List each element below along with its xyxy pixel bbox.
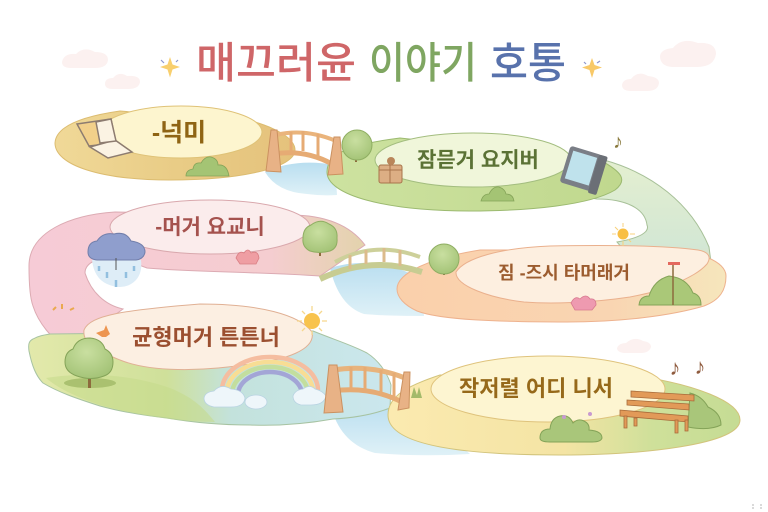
darker meadow strip (46, 375, 215, 422)
icon: large shrub with signpost (639, 262, 701, 305)
icon: sun (297, 306, 327, 335)
icon: music note 1: ♪ (613, 131, 623, 153)
decorative clouds (62, 41, 716, 353)
icon: shrub 2 (481, 187, 514, 201)
title: 호통 (490, 40, 566, 88)
bridge 2 (320, 248, 422, 279)
title (196, 40, 566, 88)
path segment: orange ground (397, 250, 726, 322)
corner marks (752, 505, 762, 508)
label: step 1 (100, 106, 262, 158)
label: step 1: -넉미 (152, 119, 206, 147)
path segment: start ground (55, 111, 295, 180)
bridge 3 (324, 365, 410, 413)
path segment: green ground (327, 138, 622, 211)
icon: small sun (612, 223, 635, 246)
water under first bridge (265, 163, 337, 195)
label: balance (blob) (84, 304, 312, 370)
label: step 4 (orange) (456, 245, 709, 303)
icon: rainbow (222, 357, 318, 395)
icon: music notes (670, 354, 706, 380)
icon: pink flower 2 (571, 296, 596, 310)
icon: sprout orange (96, 325, 110, 337)
icon: tree 3 (429, 244, 459, 275)
title: 이야기 (369, 40, 477, 88)
bridge 1 (266, 130, 343, 175)
icon: storm cloud and umbrella (88, 233, 145, 287)
label: step 2 (375, 133, 571, 187)
label: final (431, 356, 665, 422)
icon: pink flower 1 (236, 250, 259, 264)
icon: left sparkle (160, 57, 180, 78)
path segment: lower meadow and pond (29, 331, 391, 425)
icon: music notes: ♪ (670, 355, 680, 380)
label: step 3 (pink) (110, 200, 310, 254)
label: step 4 (orange): 짐 -즈시 타머래거 (498, 263, 630, 283)
icon: shrub behind bench (688, 393, 721, 429)
icon: gift box (379, 157, 402, 183)
icon: tablet (559, 146, 608, 195)
icon: tree 4 (64, 338, 116, 388)
icon: tree 2 (303, 221, 337, 256)
icon: grass tuft (411, 387, 422, 398)
icon: orange dots (53, 304, 74, 310)
label: balance (blob): 균형머거 튼튼너 (132, 325, 280, 350)
path segment: final ground (388, 375, 740, 455)
label: step 3 (pink): -머거 요교니 (155, 216, 265, 239)
icon: bench (620, 391, 694, 433)
label: step 2: 잠믇거 요지버 (417, 149, 539, 172)
water under third bridge (332, 402, 470, 455)
path segment: green band curve (570, 160, 712, 270)
icon: clouds (204, 386, 326, 409)
label: final: 작저렬 어디 니서 (459, 376, 613, 401)
path segment: pink band (29, 212, 365, 349)
title: 매끄러윤 (196, 40, 356, 88)
icon: tree 1 (342, 130, 372, 162)
water under second bridge (330, 263, 424, 316)
icon: music notes: ♪ (694, 354, 706, 379)
icon: right sparkle (582, 58, 602, 78)
icon: shrub 1 (186, 157, 229, 176)
icon: shrub with flowers (540, 412, 602, 442)
icon: open book (77, 119, 132, 158)
